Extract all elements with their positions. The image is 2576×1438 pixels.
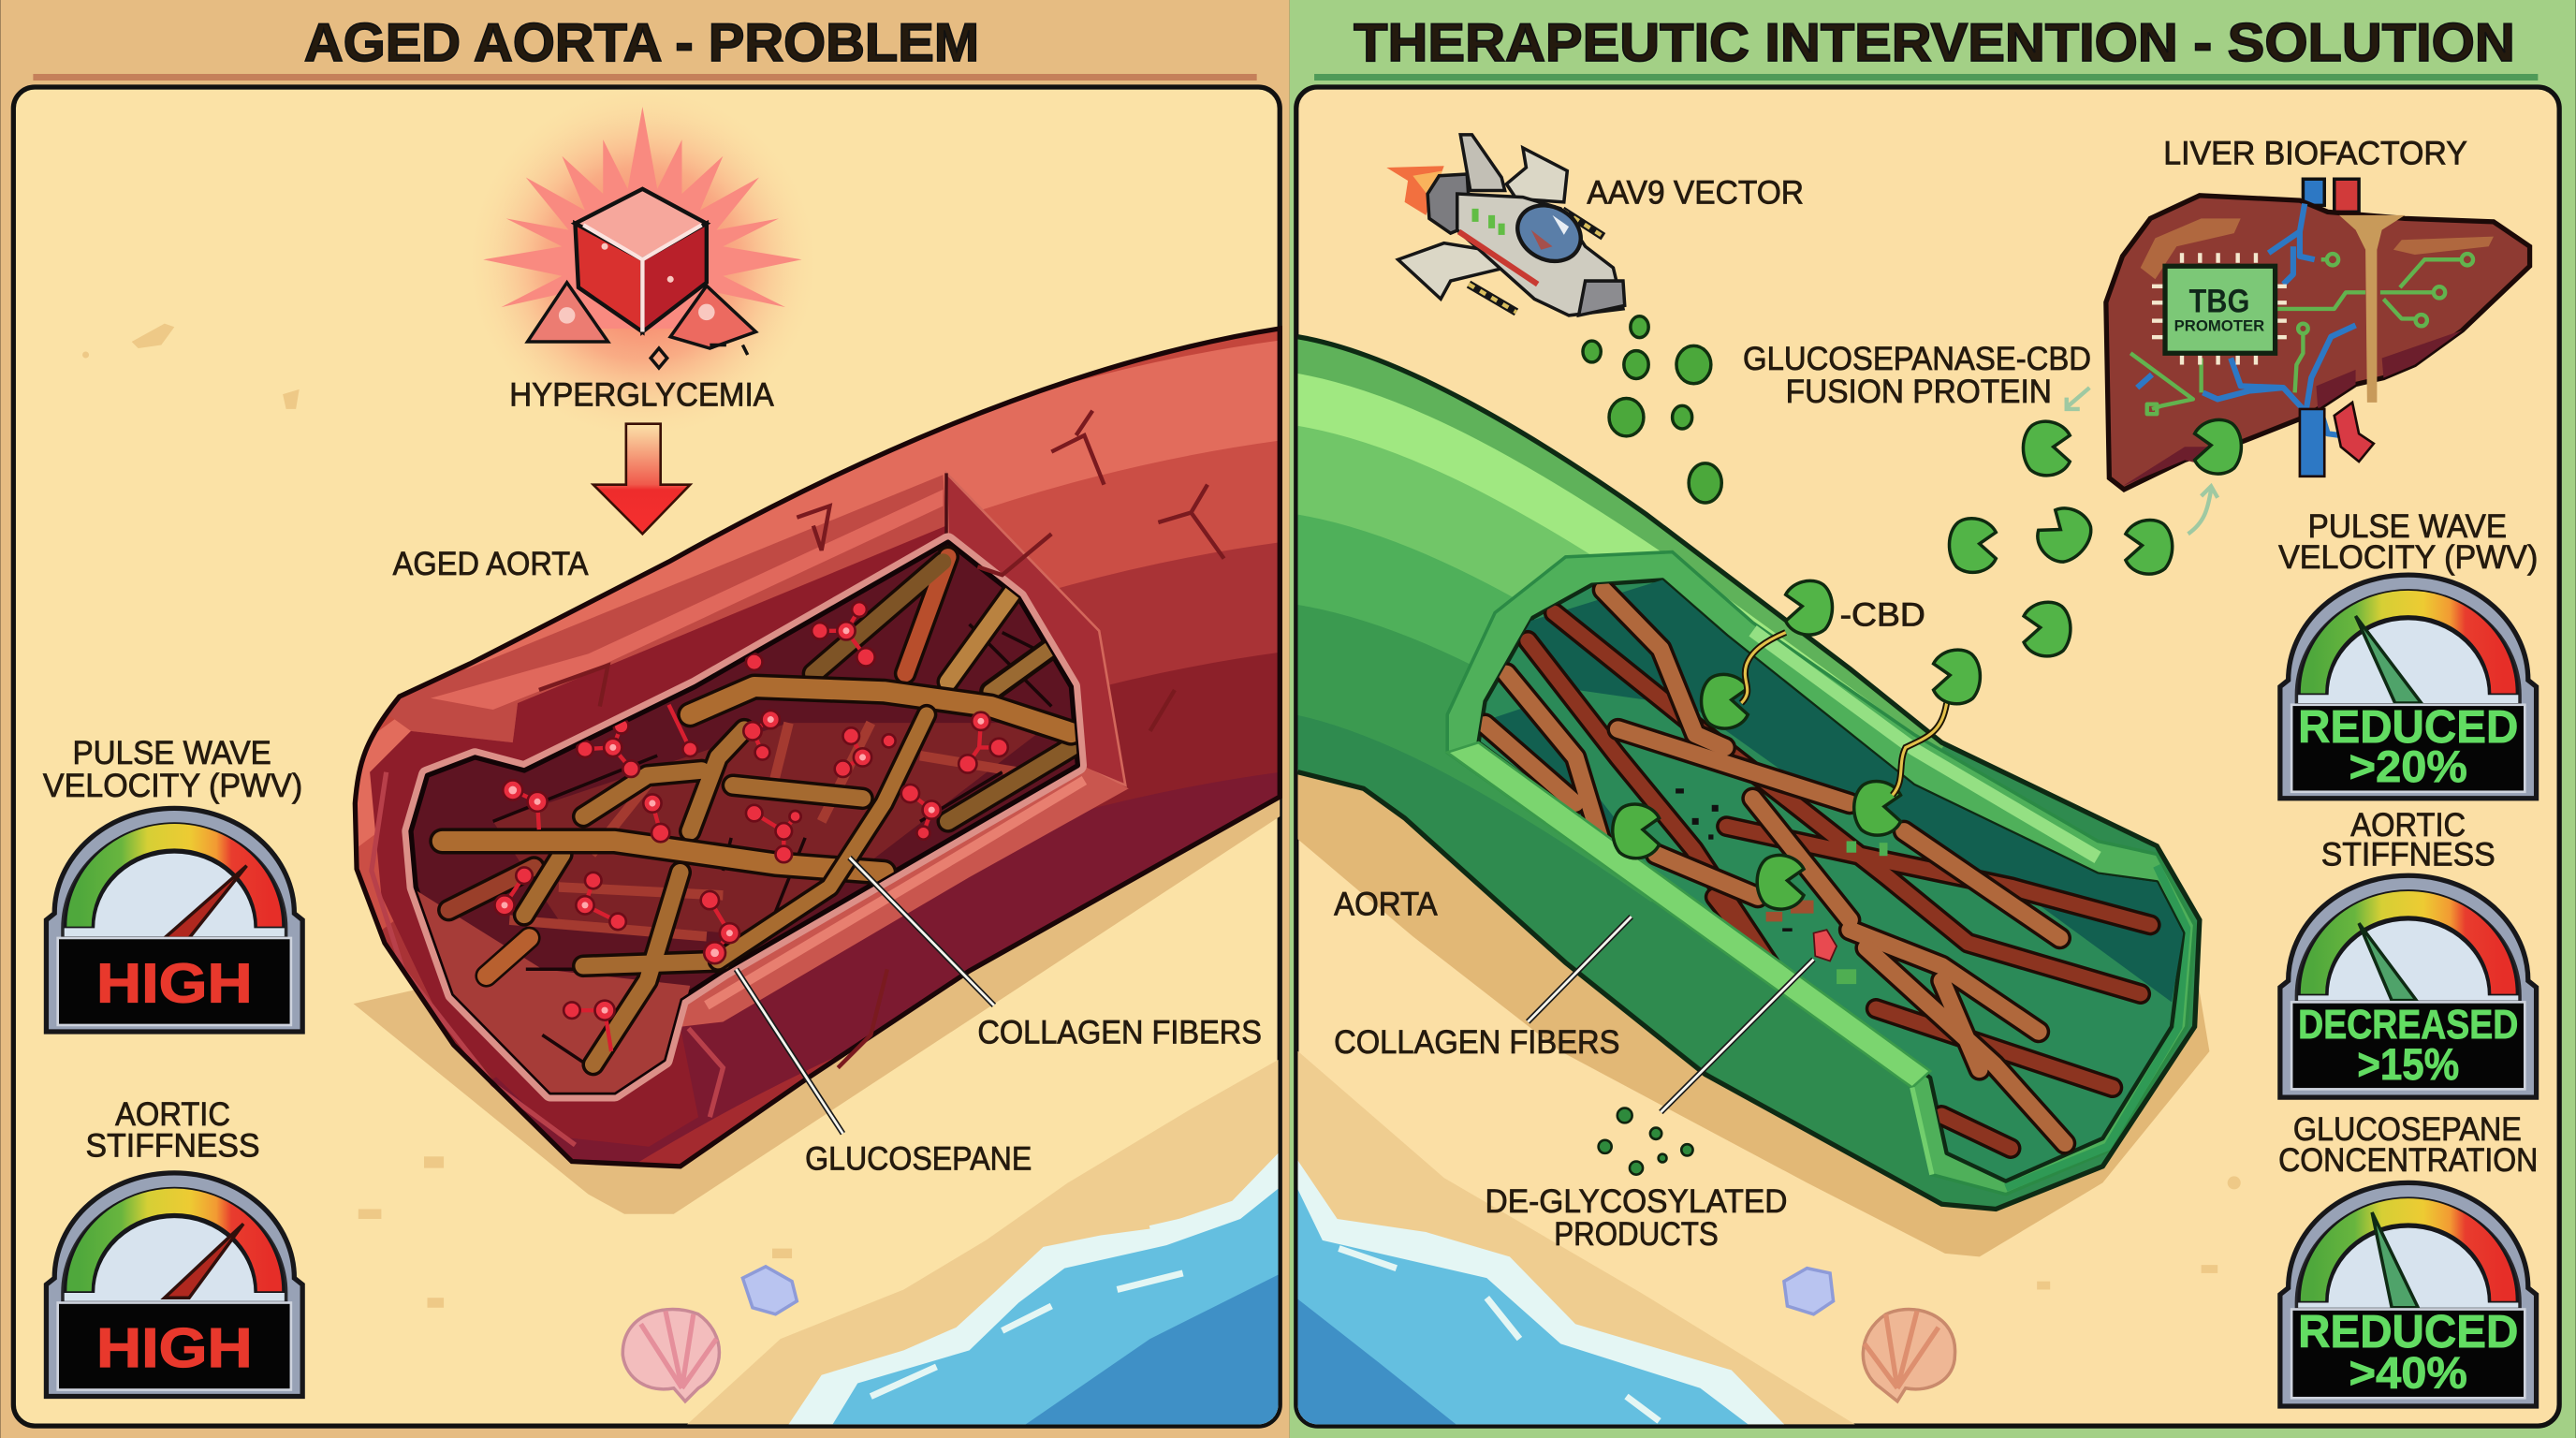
panel: therapeutic intervention solution — [1296, 87, 2559, 1430]
icon: spaceship AAV9 vector — [1386, 135, 1625, 315]
left header band — [0, 0, 1290, 1438]
window rim — [1447, 552, 2195, 1195]
water — [785, 1150, 1281, 1430]
CBD linker highlight — [1741, 633, 1947, 795]
title: aged aorta: AGED AORTA - PROBLEM — [304, 13, 979, 73]
label: aortic stiffness left: STIFFNESS — [86, 1127, 260, 1164]
label: aortic stiffness left — [86, 1096, 260, 1164]
gauge: pulse wave velocity reduced: REDUCED — [2298, 702, 2518, 753]
label: aortic stiffness right — [2321, 807, 2496, 873]
lower lip — [1912, 1088, 1932, 1175]
label: aortic stiffness left: AORTIC — [115, 1096, 230, 1133]
gauge: glucosepane reduced — [2280, 1182, 2537, 1406]
title: therapeutic intervention: THERAPEUTIC INTERVENTION - SOLUTION — [1354, 13, 2515, 73]
lower window ridge — [1447, 742, 1930, 1088]
icon: stone right — [1784, 1269, 1834, 1314]
icon: TBG promoter chip: TBG — [2188, 283, 2249, 319]
gauge: glucosepane reduced: REDUCED — [2298, 1307, 2518, 1357]
label: fusion protein — [1743, 341, 2091, 410]
label: glucosepane: GLUCOSEPANE — [805, 1140, 1032, 1177]
icon: TBG promoter chip — [2165, 266, 2276, 353]
upper cut highlight — [431, 490, 944, 710]
aged aorta tube — [352, 326, 1282, 1168]
upper rim highlight — [1753, 631, 2098, 858]
label: aged aorta: AGED AORTA — [393, 546, 589, 582]
gauge: pulse wave velocity reduced: >20% — [2349, 742, 2467, 792]
upper cut band — [388, 475, 946, 742]
icon: free enzymes — [1786, 419, 2241, 704]
label: collagen fibers: COLLAGEN FIBERS — [977, 1014, 1262, 1050]
leader: de-glycosylated — [1661, 960, 1814, 1112]
bound enzymes — [1613, 674, 1901, 909]
label: de-glycosylated products — [1486, 1183, 1787, 1253]
arrow: enzymes to liver — [2188, 486, 2217, 534]
label: pulse wave velocity left — [43, 735, 302, 804]
label: aorta: AORTA — [1334, 886, 1438, 922]
arrow: hyperglycemia to aorta — [593, 424, 690, 534]
label: pulse wave velocity left: VELOCITY (PWV) — [43, 768, 302, 804]
leader highlight: de-glycosylated — [1661, 960, 1814, 1112]
right header accent — [1314, 74, 2538, 81]
lower cut strip — [681, 766, 1129, 1027]
label: pulse wave velocity left: PULSE WAVE — [73, 735, 271, 771]
leader: collagen right — [1528, 917, 1632, 1021]
icon: TBG promoter chip: PROMOTER — [2174, 317, 2264, 335]
surface cracks — [539, 411, 1224, 1068]
gauge: aortic stiffness high — [46, 1173, 302, 1397]
label: AAV9 vector: AAV9 VECTOR — [1587, 175, 1804, 212]
right rim — [2006, 866, 2187, 1188]
icon: AAV9 particles — [1583, 316, 1721, 503]
CBD linkers — [1741, 633, 1947, 795]
icon: liver biofactory — [2106, 179, 2530, 490]
sand specks — [82, 324, 792, 1308]
icon: seashell right — [1863, 1310, 1955, 1401]
lumen interior — [411, 542, 1077, 1117]
tube outline right — [1298, 337, 2200, 1209]
gauge: aortic stiffness high: HIGH — [96, 1316, 253, 1379]
lumen interior — [1479, 580, 2183, 1181]
label: CBD: -CBD — [1840, 597, 1925, 634]
icon: de-glycosylated products — [1599, 1108, 1693, 1175]
icon: sugar cube hyperglycemia — [465, 85, 820, 440]
glucosepane molecules — [505, 609, 999, 1051]
icon: stone — [742, 1267, 797, 1314]
label: aortic stiffness right: AORTIC — [2350, 807, 2466, 844]
cut window wall — [370, 526, 1125, 1147]
gauge: aortic stiffness decreased: >15% — [2357, 1040, 2459, 1090]
wet sand — [682, 1058, 1281, 1430]
sand shoreline right — [1296, 1049, 1863, 1430]
shadow under aged aorta — [354, 772, 1280, 1214]
leader highlight: collagen right — [1528, 917, 1632, 1021]
label: aortic stiffness right: STIFFNESS — [2321, 837, 2496, 873]
label: glucosepane concentration — [2278, 1111, 2538, 1179]
apex seam — [945, 473, 947, 542]
label: de-glycosylated products: PRODUCTS — [1554, 1216, 1719, 1253]
gauge: aortic stiffness decreased — [2280, 875, 2537, 1097]
right cut wall — [946, 473, 1125, 785]
tube shadow right — [1296, 764, 2209, 1256]
arrow: liver to enzymes — [2067, 388, 2089, 409]
leader highlight: glucosepane — [736, 969, 842, 1134]
icon: seashell — [622, 1310, 719, 1401]
collagen fibers — [442, 557, 1071, 1064]
gauge: pulse wave velocity reduced — [2280, 575, 2537, 799]
panel: aged aorta problem — [13, 87, 1281, 1430]
right header band — [1290, 0, 2576, 1438]
label: fusion protein: GLUCOSEPANASE-CBD — [1743, 341, 2091, 377]
label: glucosepane concentration: GLUCOSEPANE — [2293, 1111, 2522, 1148]
gauge: pulse wave velocity high: HIGH — [96, 951, 253, 1014]
leader: collagen fibers — [849, 858, 994, 1005]
gauge: aortic stiffness decreased: DECREASED — [2298, 1002, 2518, 1048]
front lip — [372, 772, 723, 1145]
left header accent — [33, 74, 1257, 81]
leader: glucosepane — [736, 969, 842, 1134]
gauge: glucosepane reduced: >40% — [2349, 1349, 2467, 1399]
label: hyperglycemia: HYPERGLYCEMIA — [509, 376, 774, 413]
label: glucosepane concentration: CONCENTRATION — [2278, 1142, 2538, 1179]
treated aorta tube — [1281, 337, 2200, 1209]
tube outline — [355, 329, 1280, 1167]
label: collagen fibers right: COLLAGEN FIBERS — [1334, 1024, 1619, 1061]
label: de-glycosylated products: DE-GLYCOSYLATED — [1486, 1183, 1787, 1220]
label: pulse wave velocity right — [2278, 508, 2538, 576]
label: pulse wave velocity right: PULSE WAVE — [2308, 508, 2507, 545]
water right — [1296, 1158, 1789, 1430]
gauge: pulse wave velocity high — [46, 808, 302, 1032]
leader highlight: collagen fibers — [849, 858, 994, 1005]
label: fusion protein: FUSION PROTEIN — [1786, 374, 2052, 410]
label: pulse wave velocity right: VELOCITY (PWV) — [2278, 539, 2538, 576]
lower strip highlight — [707, 780, 1084, 1005]
label: liver biofactory: LIVER BIOFACTORY — [2163, 135, 2467, 171]
collagen fibers treated — [1486, 590, 2150, 1149]
